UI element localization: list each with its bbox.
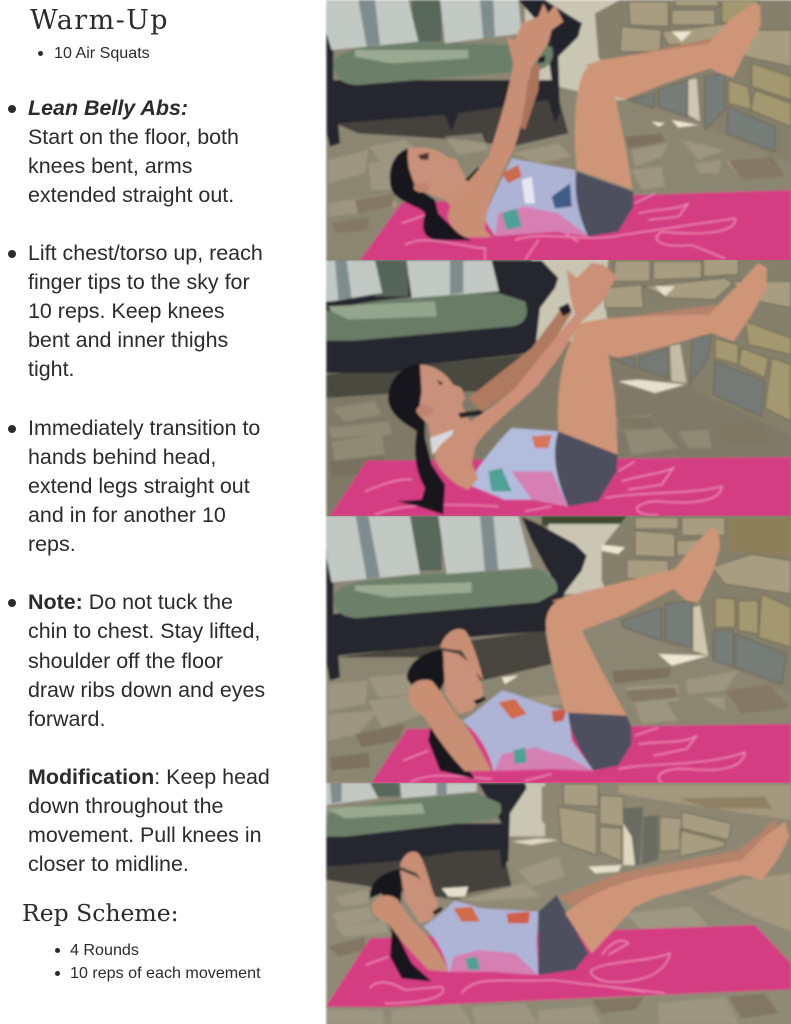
step: lift chest: tight.	[28, 357, 74, 381]
woman	[388, 364, 445, 515]
modification: down throughout the	[28, 794, 223, 818]
step: note: shoulder off the floor	[28, 648, 223, 672]
modification: movement. Pull knees in	[28, 823, 262, 847]
photo 3: hands behind head, knees in	[325, 516, 791, 783]
pillows	[326, 261, 382, 301]
step: transition: and in for another 10	[28, 503, 226, 527]
yoga mat	[326, 925, 791, 1007]
step: note: forward.	[28, 707, 105, 731]
step: Lean Belly Abs: knees bent, arms	[28, 154, 192, 178]
photo 4: legs extended	[325, 783, 791, 1024]
step: lift chest: bent and inner thighs	[28, 328, 228, 352]
step: note	[8, 590, 265, 731]
heading: Warm-Up: Warm-Up	[30, 5, 169, 36]
step: transition: hands behind head,	[28, 445, 216, 469]
photo 1: arms reaching up	[325, 0, 791, 260]
woman	[407, 649, 475, 779]
couch frame	[326, 517, 587, 681]
step: Lean Belly Abs	[8, 96, 239, 207]
rep scheme list	[55, 941, 261, 982]
step: transition: reps.	[28, 532, 76, 556]
step: note: draw ribs down and eyes	[28, 678, 265, 702]
pillows	[327, 0, 418, 50]
step: lift chest	[8, 241, 263, 381]
modification: Modification: Keep head	[28, 765, 270, 789]
pillows	[326, 783, 378, 805]
step: transition: Immediately transition to	[28, 416, 260, 440]
photo 2: chest lifted, fingers to sky	[325, 260, 791, 516]
step: Lean Belly Abs: Start on the floor, both	[28, 125, 239, 149]
step: Lean Belly Abs: Lean Belly Abs:	[28, 96, 188, 120]
rep scheme list: 10 reps of each movement	[70, 964, 261, 982]
yoga mat	[372, 724, 791, 784]
step: note: chin to chest. Stay lifted,	[28, 619, 260, 643]
heading: Rep Scheme: Rep Scheme:	[22, 899, 179, 927]
couch frame	[326, 783, 527, 870]
step: transition: extend legs straight out	[28, 474, 250, 498]
warm-up list: 10 Air Squats	[54, 44, 150, 62]
yoga mat	[360, 190, 791, 262]
step: transition	[8, 416, 260, 556]
couch frame	[326, 261, 558, 373]
modification: closer to midline.	[28, 852, 189, 876]
step: lift chest: finger tips to the sky for	[28, 270, 250, 294]
woman	[390, 148, 472, 241]
rep scheme list: 4 Rounds	[70, 941, 139, 959]
pillows	[327, 516, 420, 582]
woman	[370, 869, 432, 982]
step: lift chest: Lift chest/torso up, reach	[28, 241, 263, 265]
step: lift chest: 10 reps. Keep knees	[28, 299, 225, 323]
yoga mat	[330, 457, 791, 516]
modification	[28, 765, 270, 876]
step: note: Note: Do not tuck the	[28, 590, 233, 614]
couch frame	[326, 0, 582, 147]
step: Lean Belly Abs: extended straight out.	[28, 183, 234, 207]
